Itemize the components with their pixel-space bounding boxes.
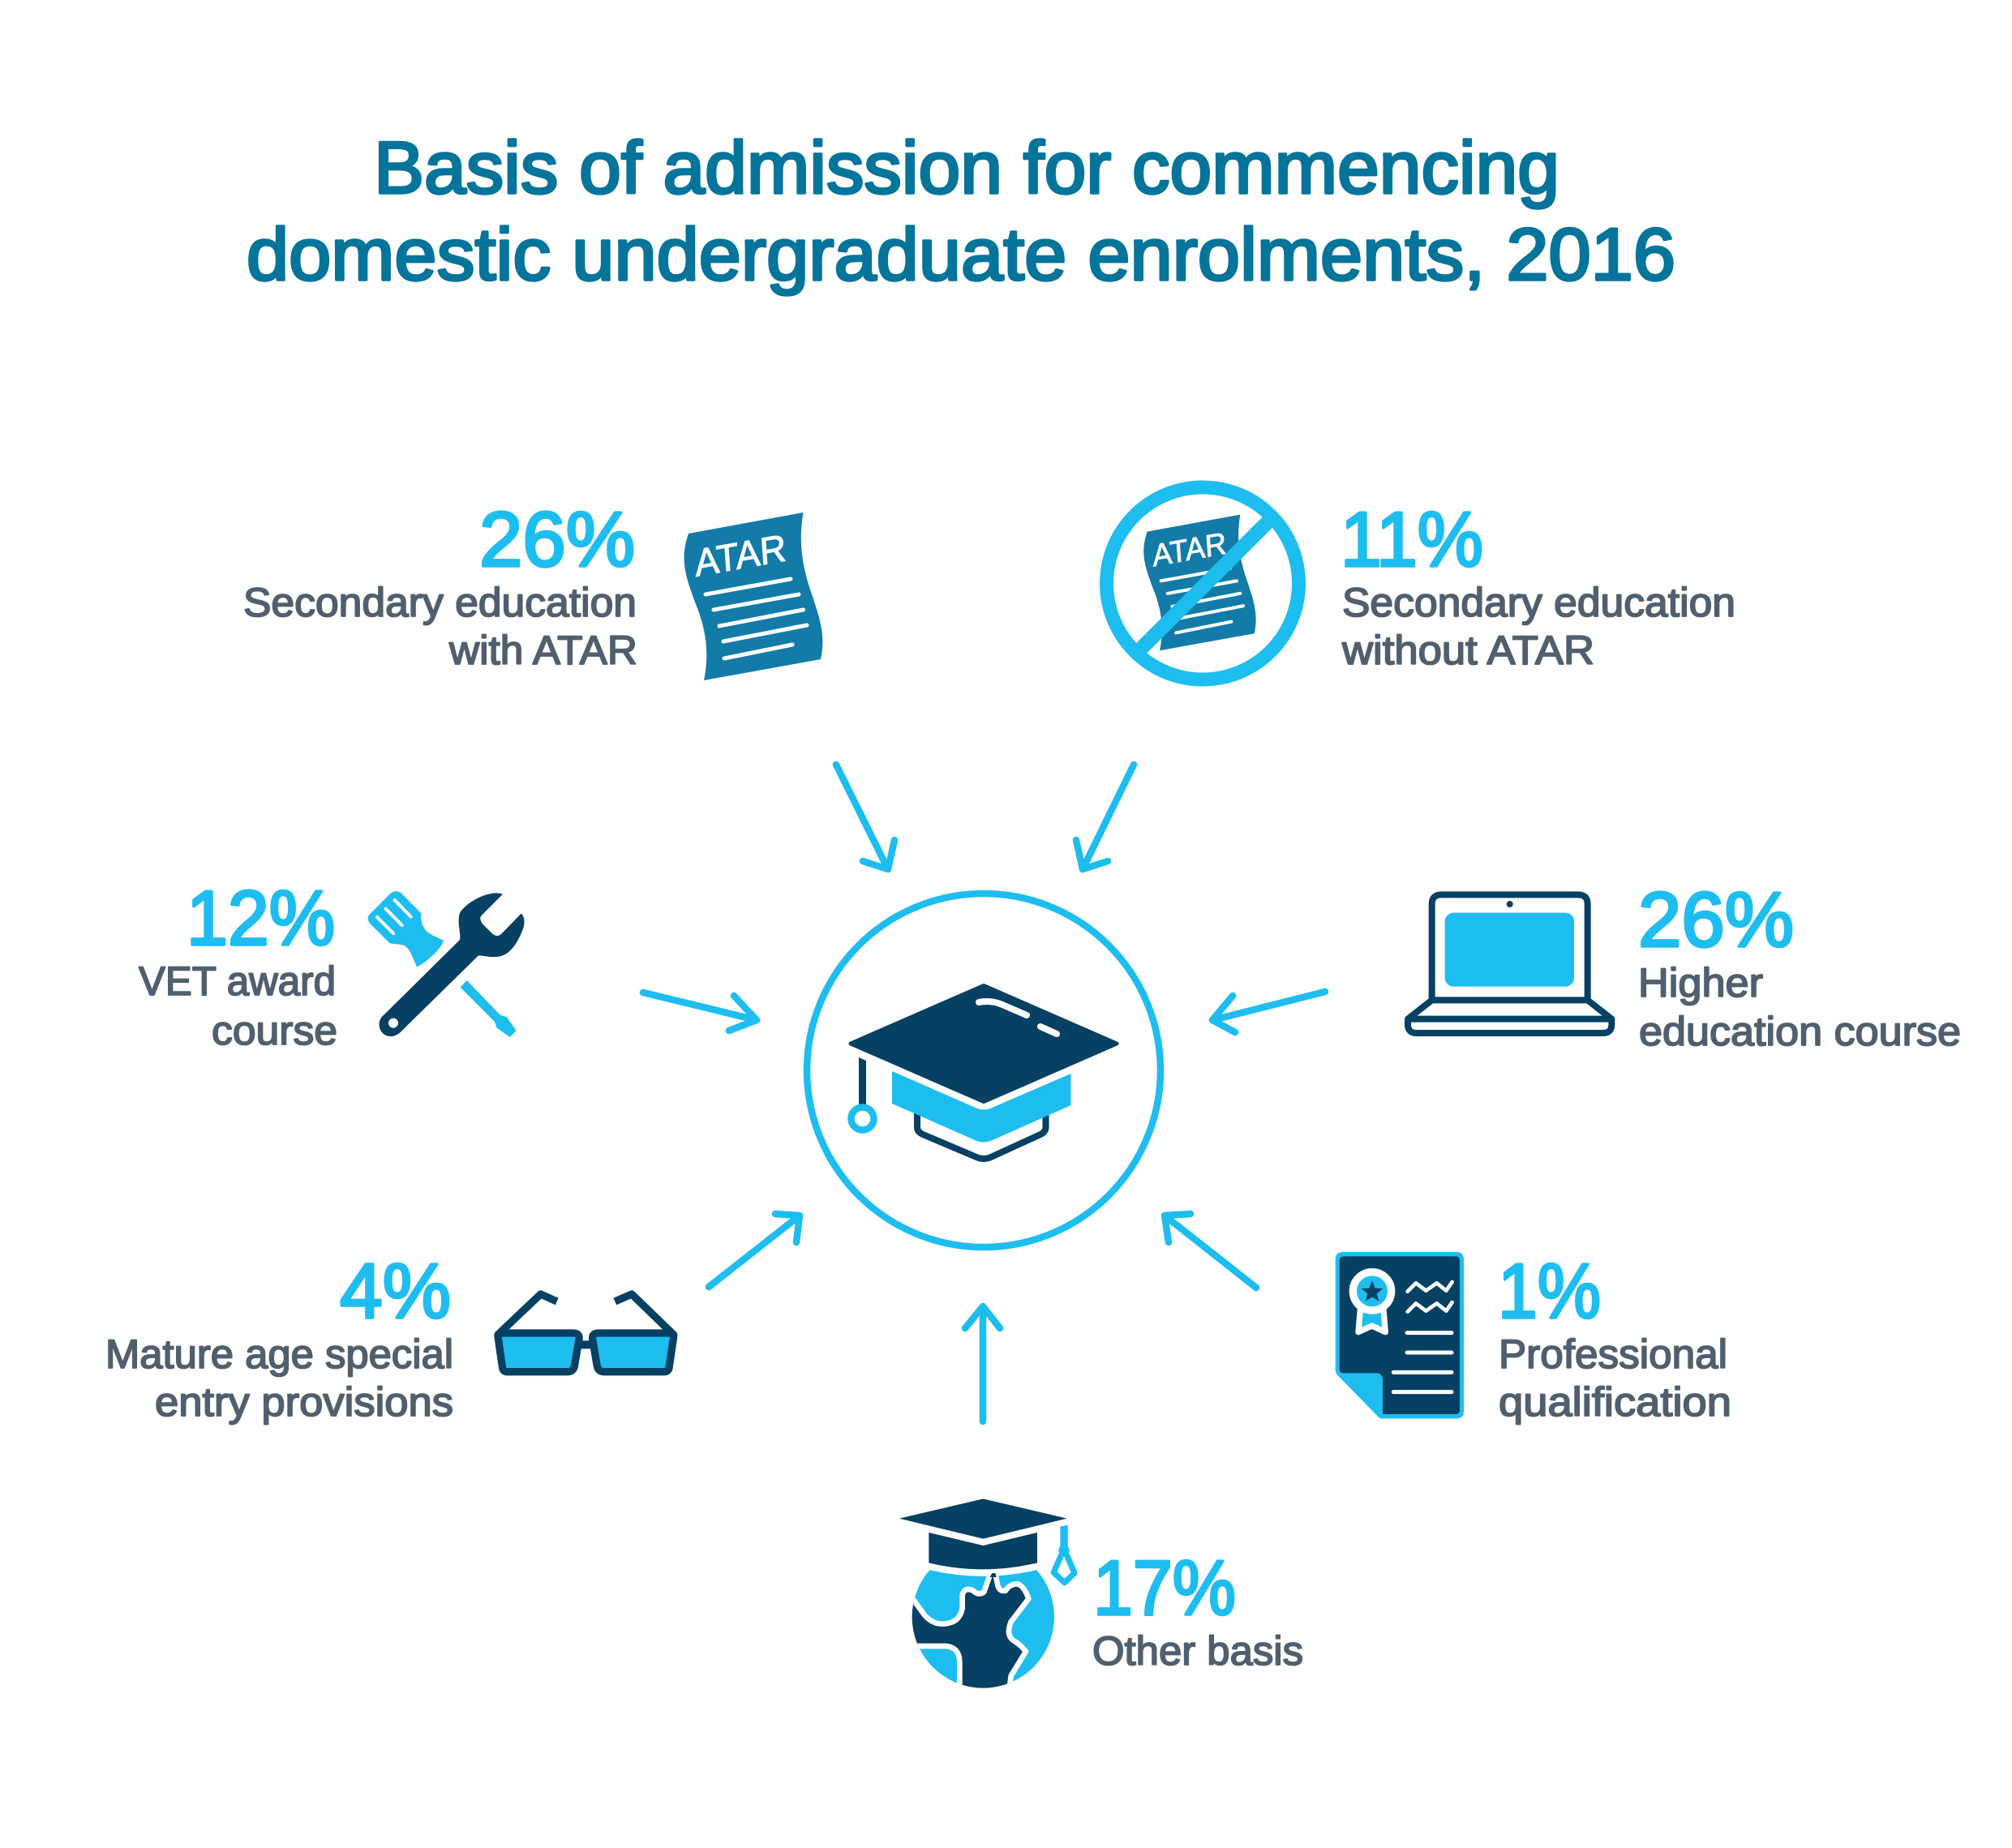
stat: 4%: 4% <box>340 1248 451 1335</box>
title: Basis of admission for commencing <box>374 127 1559 209</box>
stat: 11% secondary without ATAR: 11% <box>1341 496 1483 583</box>
arrow: top left <box>836 765 894 869</box>
label: secondary education with ATAR <box>243 580 637 673</box>
label: VET award course: course <box>212 1008 337 1053</box>
label: mature age special entry provisions <box>105 1331 453 1425</box>
icon: tools <box>368 891 525 1037</box>
label: secondary education with ATAR: with ATAR <box>448 628 637 673</box>
stat: 1%: 1% <box>1498 1248 1601 1335</box>
label: mature age special entry provisions: entry provisions <box>155 1379 453 1425</box>
label: VET award course <box>139 958 337 1053</box>
label: professional qualification: qualification <box>1499 1379 1731 1425</box>
panel: professional qualification <box>1336 1248 1731 1425</box>
icon: certificate <box>1336 1252 1464 1418</box>
icon: graduation cap <box>851 986 1117 1159</box>
panel: VET award course <box>139 875 525 1053</box>
icon: crossed-out ATAR document <box>1106 487 1299 680</box>
stat: 12% VET: 12% <box>187 875 335 962</box>
arrow: left <box>643 993 757 1031</box>
central circle with graduation cap <box>807 894 1160 1247</box>
panel: secondary education with ATAR <box>243 496 822 680</box>
label: secondary education without ATAR: Secondary education <box>1342 580 1735 625</box>
icon: ATAR document <box>684 512 822 680</box>
icon: glasses <box>498 1294 674 1372</box>
icon: laptop <box>1408 894 1611 1033</box>
label: secondary education without ATAR <box>1341 580 1735 673</box>
stat: 26% higher education: 26% <box>1638 877 1794 963</box>
arrow: right <box>1212 992 1325 1032</box>
icon: crossed-out ATAR document: ATAR <box>1152 526 1228 574</box>
label: other basis: Other basis <box>1092 1628 1303 1674</box>
arrow: bottom <box>965 1306 1000 1421</box>
label: higher education course <box>1638 960 1961 1054</box>
title: domestic undergraduate enrolments, 2016 <box>247 214 1675 296</box>
label: VET award course: VET award <box>139 958 336 1004</box>
label: professional qualification <box>1499 1331 1731 1425</box>
icon: globe with graduation cap <box>898 1494 1075 1697</box>
label: higher education course: education course <box>1639 1009 1961 1054</box>
icon: ATAR document: ATAR <box>693 525 787 585</box>
panel: higher education course <box>1408 877 1961 1054</box>
arrow: lower right <box>1165 1214 1256 1288</box>
label: mature age special entry provisions: Mature age special <box>105 1331 453 1377</box>
panel: mature age special entry <box>105 1248 674 1425</box>
arrow: top right <box>1076 765 1134 869</box>
label: secondary education with ATAR: Secondary education <box>243 580 637 625</box>
stat: 17%: 17% <box>1093 1545 1236 1631</box>
label: higher education course: Higher <box>1638 960 1763 1005</box>
panel: secondary education without ATAR <box>1106 487 1735 680</box>
title <box>247 127 1675 296</box>
panel: other basis <box>898 1494 1303 1697</box>
label: professional qualification: Professional <box>1499 1331 1727 1377</box>
label: secondary education without ATAR: without ATAR <box>1341 628 1594 673</box>
arrow: lower left <box>709 1214 800 1287</box>
stat: 26% secondary with ATAR: 26% <box>479 496 635 583</box>
